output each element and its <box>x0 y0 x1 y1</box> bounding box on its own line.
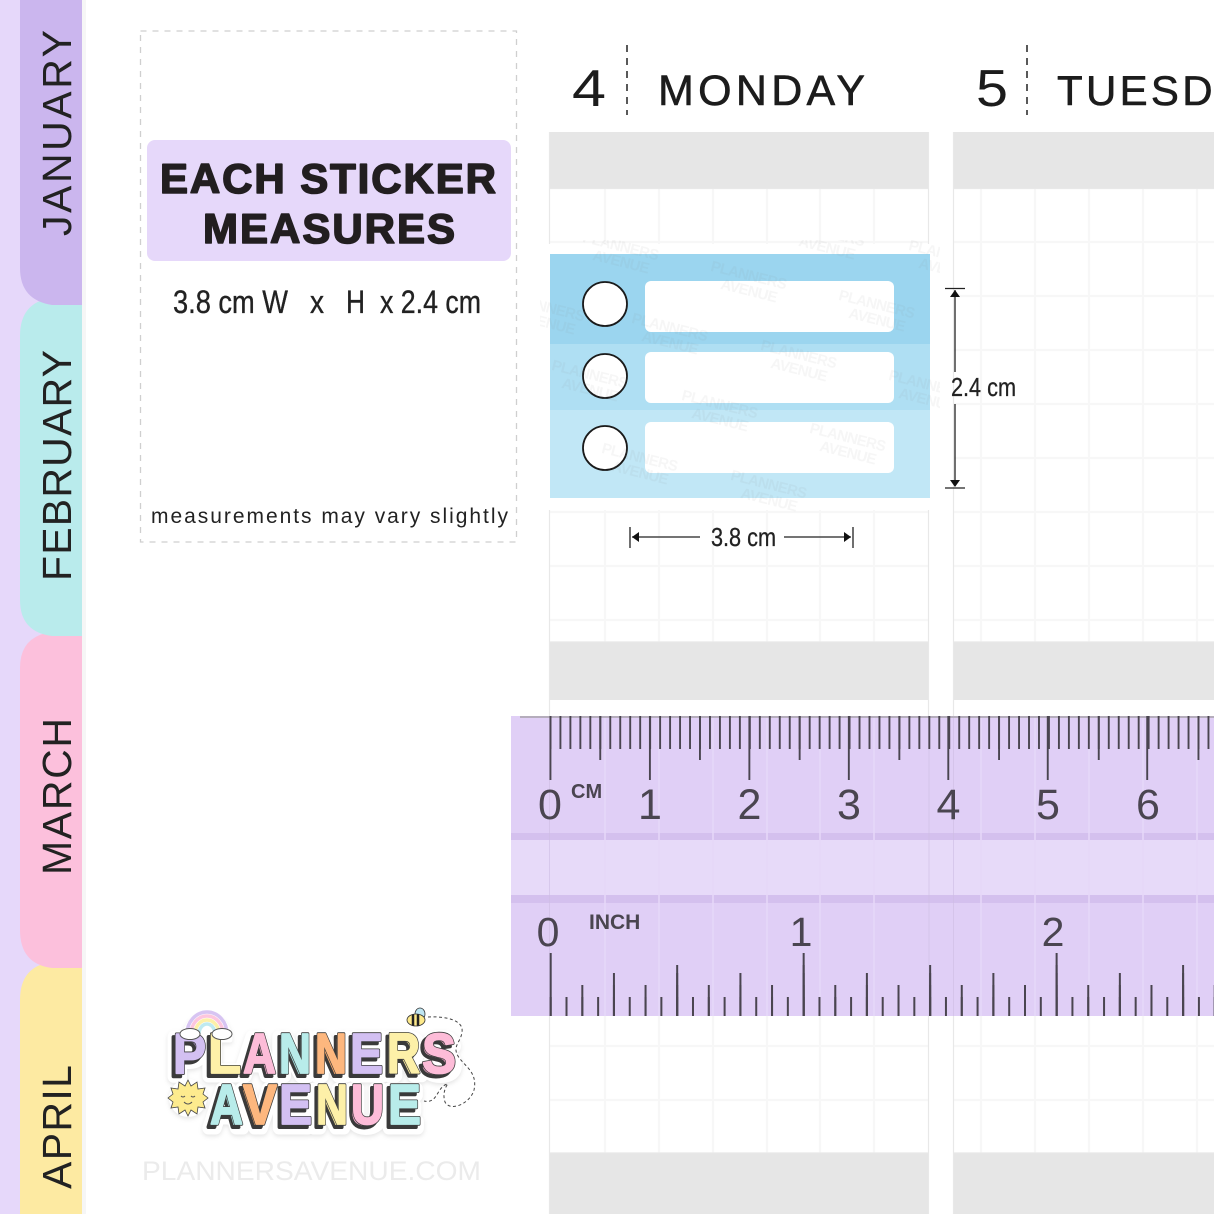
centimetre scale labels: 0 <box>538 781 562 829</box>
day header: 5 Tuesday <box>976 45 1214 118</box>
logo word: PLANNERS: S <box>422 1022 456 1086</box>
logo word: PLANNERS: P <box>170 1025 203 1089</box>
dimension: height 2.4 cm: 2.4 cm <box>951 372 1016 402</box>
watermarks: PLANNERS <box>581 229 661 264</box>
watermarks: PLANNERS <box>709 258 789 293</box>
tab: February: FEBRUARY <box>34 350 80 581</box>
logo word: PLANNERS: L <box>208 1022 241 1086</box>
inch scale labels: 1 <box>790 909 812 955</box>
centimetre scale labels: 3 <box>837 781 861 829</box>
logo halo <box>170 1015 458 1141</box>
logo word: AVENUE: V <box>243 1073 277 1137</box>
watermarks: AVENUE <box>917 255 977 286</box>
watermarks: PLANNERS <box>630 310 710 345</box>
ruler <box>511 716 1214 1016</box>
logo word: AVENUE <box>207 1073 421 1140</box>
disclaimer: measurements may vary slightly <box>151 505 508 528</box>
watermarks: AVENUE <box>610 458 670 489</box>
logo word: AVENUE: N <box>316 1073 348 1137</box>
logo word: AVENUE: V <box>240 1076 274 1140</box>
logo word: PLANNERS: E <box>350 1022 383 1086</box>
heading: MEASURES <box>203 205 455 252</box>
watermarks: PLANNERS <box>507 290 587 325</box>
logo word: PLANNERS: N <box>276 1025 308 1089</box>
watermarks: AVENUE <box>560 375 620 406</box>
watermarks: PLANNERS <box>729 467 809 502</box>
centimetre scale labels: 6 <box>1136 781 1160 829</box>
watermarks: PLANNERS <box>837 287 917 322</box>
writing bars <box>645 281 894 473</box>
watermarks: PLANNERS <box>808 420 888 455</box>
watermarks: PLANNERS <box>600 440 680 475</box>
logo word: PLANNERS: N <box>312 1025 344 1089</box>
icon: sun <box>168 1080 208 1116</box>
white sticker backing <box>541 244 937 510</box>
day column: Tuesday <box>953 132 1214 1214</box>
size text: H <box>346 284 365 320</box>
logo word: AVENUE: E <box>388 1073 421 1137</box>
logo word: PLANNERS: N <box>315 1022 347 1086</box>
watermarks: AVENUE <box>591 247 651 278</box>
logo halo: AVENUE <box>207 1077 420 1141</box>
dimension: width 3.8 cm <box>630 522 853 552</box>
checkbox circles <box>583 282 627 470</box>
logo word: PLANNERS: P <box>173 1022 206 1086</box>
blue bands <box>550 254 930 498</box>
sticker sample <box>540 240 940 511</box>
watermarks: AVENUE <box>769 355 829 386</box>
logo word: PLANNERS: E <box>347 1025 380 1089</box>
watermarks: PLANNERS <box>759 337 839 372</box>
logo word: AVENUE: E <box>385 1076 418 1140</box>
logo word: PLANNERS: A <box>240 1025 273 1089</box>
tab: April: APRIL <box>34 1065 80 1189</box>
measurement panel <box>140 31 516 542</box>
heading <box>147 140 511 261</box>
watermarks: PLANNERS <box>787 215 867 250</box>
watermarks <box>540 240 940 511</box>
logo word: PLANNERS: N <box>315 1022 347 1086</box>
logo word: AVENUE: V <box>243 1073 277 1137</box>
cm unit label: CM <box>571 781 602 803</box>
size text: x <box>310 284 324 320</box>
logo word: AVENUE: A <box>207 1076 240 1140</box>
tab: March: MARCH <box>34 718 80 875</box>
tab: February <box>20 298 82 636</box>
day header: 4 Monday: 4 <box>572 60 606 118</box>
logo word: AVENUE: E <box>276 1076 309 1140</box>
inch scale labels: 0 <box>537 909 559 955</box>
logo word: PLANNERS: R <box>387 1022 420 1086</box>
watermarks: PLANNERS <box>550 357 630 392</box>
planner page grid <box>549 132 1214 1214</box>
tab: April <box>20 962 82 1214</box>
centimetre scale labels: 4 <box>937 781 960 829</box>
logo word: PLANNERS <box>170 1022 456 1089</box>
centimetre scale labels: 5 <box>1036 781 1060 829</box>
logo word: AVENUE: U <box>351 1073 384 1137</box>
watermarks: AVENUE <box>690 405 750 436</box>
logo word: PLANNERS: P <box>173 1022 206 1086</box>
watermarks: AVENUE <box>719 276 779 307</box>
size text <box>173 284 481 320</box>
watermarks: PLANNERS <box>680 387 760 422</box>
website address: PLANNERSAVENUE.COM <box>142 1156 481 1186</box>
tab: January <box>20 0 82 305</box>
day header: 4 Monday <box>572 45 865 118</box>
centimetre scale ticks <box>550 732 1214 748</box>
icon: rainbow <box>187 1012 227 1034</box>
logo word: AVENUE: A <box>210 1073 243 1137</box>
logo word: PLANNERS: A <box>243 1022 276 1086</box>
day header: 5 Tuesday: 5 <box>976 60 1008 118</box>
logo word: PLANNERS: L <box>205 1025 238 1089</box>
watermarks: AVENUE <box>517 308 577 339</box>
watermarks: AVENUE <box>739 485 799 516</box>
watermarks: AVENUE <box>818 438 878 469</box>
day header: 4 Monday: MONDAY <box>658 67 865 115</box>
logo word: AVENUE: N <box>313 1076 345 1140</box>
watermarks: PLANNERS <box>907 237 987 272</box>
inch scale labels <box>537 909 1064 955</box>
logo word: PLANNERS: S <box>422 1022 456 1086</box>
watermarks: AVENUE <box>640 328 700 359</box>
size text: x 2.4 cm <box>380 284 481 320</box>
logo word: PLANNERS: R <box>384 1025 417 1089</box>
tab: March <box>20 632 82 968</box>
logo word: PLANNERS: E <box>350 1022 383 1086</box>
watermarks: AVENUE <box>897 385 957 416</box>
watermarks: AVENUE <box>847 305 907 336</box>
size text: 3.8 cm W <box>173 284 289 320</box>
icon: bee <box>407 1008 425 1026</box>
heading: EACH STICKER <box>160 155 496 202</box>
logo word: AVENUE: E <box>388 1073 421 1137</box>
centimetre scale labels: 1 <box>638 781 662 829</box>
centimetre scale labels: 2 <box>738 781 761 829</box>
logo word: AVENUE: U <box>351 1073 384 1137</box>
dimension: width 3.8 cm: 3.8 cm <box>711 522 776 552</box>
logo word: AVENUE: U <box>348 1076 381 1140</box>
dimension: height 2.4 cm <box>945 288 1016 488</box>
logo word: PLANNERS: N <box>279 1022 311 1086</box>
logo word: PLANNERS: N <box>279 1022 311 1086</box>
watermarks: PLANNERS <box>887 367 967 402</box>
dashed panel border <box>140 31 516 542</box>
logo word: PLANNERS: S <box>419 1025 453 1089</box>
ruler body <box>511 716 1214 1016</box>
brand logo <box>168 1008 475 1141</box>
inch scale labels: 2 <box>1042 909 1064 955</box>
inch scale ticks <box>550 984 1214 1006</box>
tab: January: JANUARY <box>34 30 80 236</box>
day column: Monday <box>549 132 929 1214</box>
logo word: AVENUE: E <box>279 1073 312 1137</box>
inch unit label: INCH <box>589 911 640 934</box>
logo word: PLANNERS: R <box>387 1022 420 1086</box>
centimetre scale labels <box>538 781 1160 829</box>
dashed bee trail <box>424 1017 475 1106</box>
logo halo: PLANNERS <box>170 1025 458 1089</box>
logo word: AVENUE: A <box>210 1073 243 1137</box>
logo word: AVENUE: N <box>316 1073 348 1137</box>
logo word: PLANNERS: A <box>243 1022 276 1086</box>
side strip background <box>0 0 86 1214</box>
logo word: AVENUE: E <box>279 1073 312 1137</box>
rainbow clouds <box>180 1028 232 1040</box>
watermarks: AVENUE <box>797 233 857 264</box>
logo word: PLANNERS: L <box>208 1022 241 1086</box>
